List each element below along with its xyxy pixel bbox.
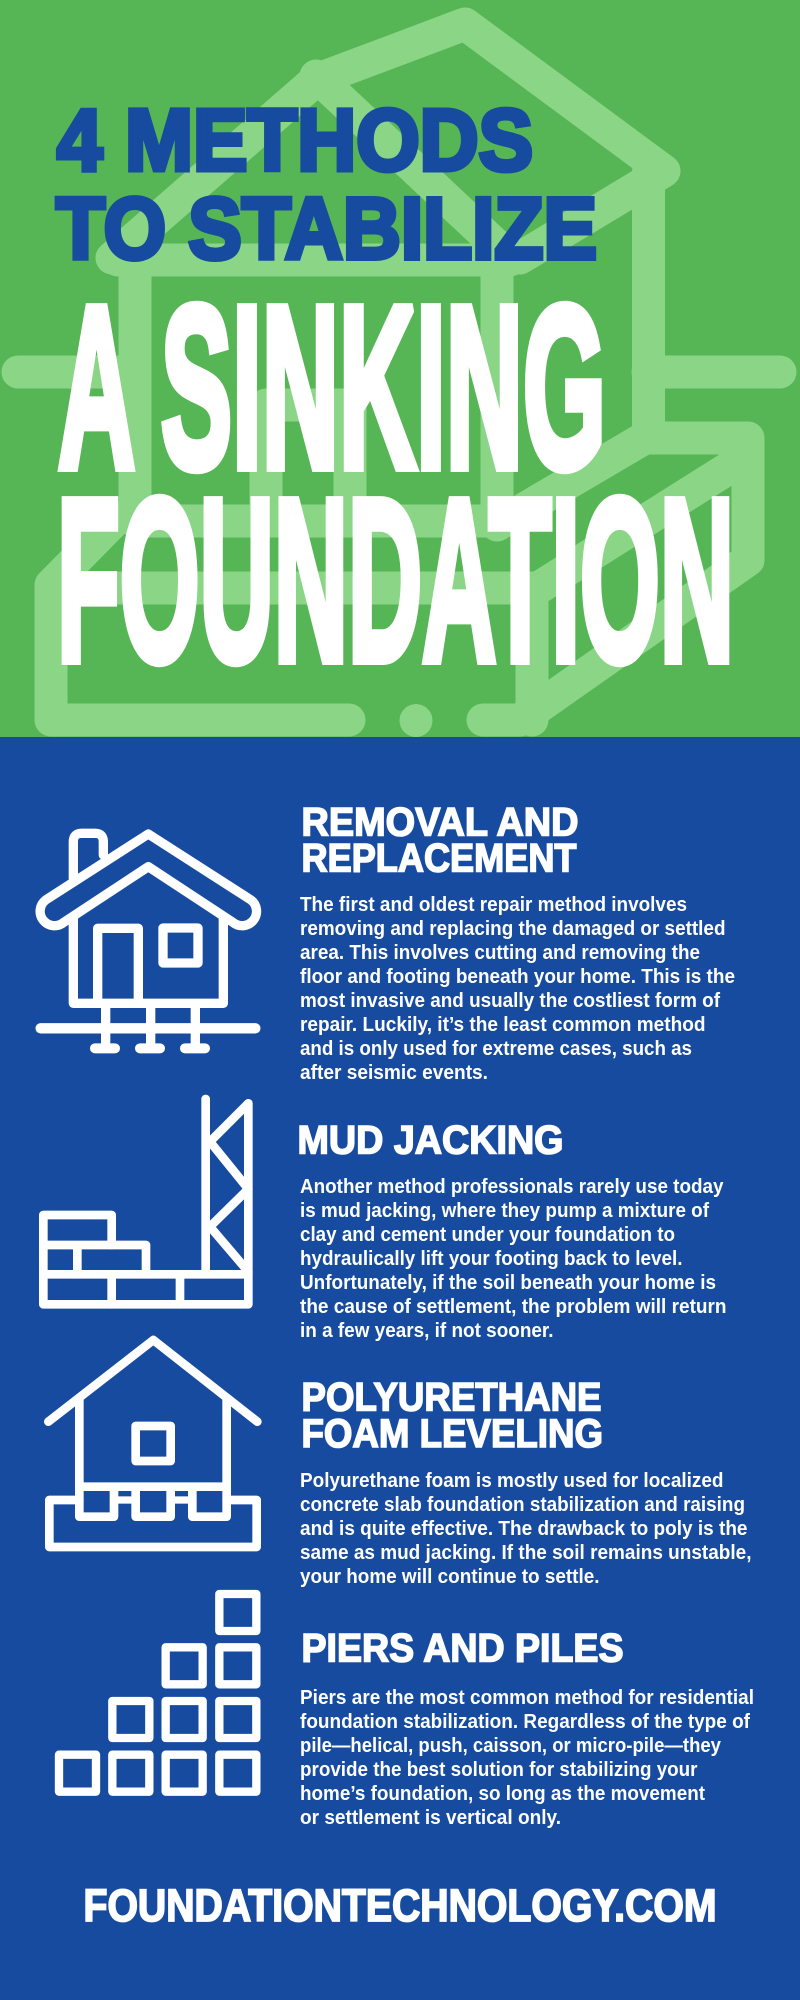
title line: to stabilize: TO STABILIZE (56, 180, 597, 278)
text block: removal and replacement: and is only used for extreme cases, such as (300, 1037, 692, 1060)
text block: mud jacking: clay and cement under your foundation to (300, 1223, 675, 1246)
text block: piers and piles (300, 1686, 754, 1829)
text block: removal and replacement: most invasive and usually the costliest form of (300, 989, 720, 1012)
title line: 4 methods: 4 METHODS (57, 92, 533, 189)
text block: piers and piles: provide the best solution for stabilizing your (300, 1758, 698, 1781)
title (56, 92, 734, 709)
text block: removal and replacement: after seismic events. (300, 1061, 488, 1084)
text block: removal and replacement: area. This involves cutting and removing the (300, 941, 700, 964)
text block: removal and replacement: floor and footing beneath your home. This is the (300, 965, 735, 988)
text block: removal and replacement: repair. Luckily, it’s the least common method (300, 1013, 706, 1036)
text block: piers and piles: pile—helical, push, caisson, or micro-pile—they (300, 1734, 722, 1757)
text block: polyurethane foam leveling: same as mud jacking. If the soil remains unstable, (300, 1541, 752, 1564)
icon: house on foam-leveled slab (48, 1340, 257, 1547)
heading: removal and replacement: REMOVAL AND (302, 800, 578, 844)
text block: removal and replacement (300, 893, 735, 1084)
text block: piers and piles: foundation stabilization. Regardless of the type of (300, 1710, 750, 1733)
heading: polyurethane foam leveling (302, 1376, 603, 1456)
text block: polyurethane foam leveling: your home will continue to settle. (300, 1565, 600, 1588)
text block: mud jacking (300, 1175, 726, 1342)
heading: removal and replacement: REPLACEMENT (302, 836, 576, 880)
text block: piers and piles: or settlement is vertical only. (300, 1806, 561, 1829)
heading: polyurethane foam leveling: POLYURETHANE (302, 1376, 602, 1420)
text block: mud jacking: in a few years, if not sooner. (300, 1319, 554, 1342)
text block: polyurethane foam leveling: and is quite effective. The drawback to poly is the (300, 1517, 748, 1540)
text block: removal and replacement: removing and replacing the damaged or settled (300, 917, 726, 940)
text block: removal and replacement: The first and oldest repair method involves (300, 893, 687, 916)
text block: mud jacking: the cause of settlement, the problem will return (300, 1295, 726, 1318)
text block: piers and piles: Piers are the most common method for residential (300, 1686, 754, 1709)
text block: mud jacking: is mud jacking, where they pump a mixture of (300, 1199, 709, 1222)
icon: house on piers (40, 833, 257, 1048)
text block: mud jacking: Unfortunately, if the soil beneath your home is (300, 1271, 716, 1294)
text block: mud jacking: Another method professionals rarely use today (300, 1175, 724, 1198)
icon: background house watermark (18, 24, 780, 737)
heading: removal and replacement (302, 800, 578, 880)
text block: piers and piles: home’s foundation, so long as the movement (300, 1782, 705, 1805)
text block: polyurethane foam leveling (300, 1469, 752, 1588)
text block: polyurethane foam leveling: Polyurethane foam is mostly used for localized (300, 1469, 724, 1492)
footer website: FOUNDATIONTECHNOLOGY.COM (84, 1880, 716, 1931)
icon: brick wall and scaffold (43, 1099, 248, 1304)
heading: polyurethane foam leveling: FOAM LEVELING (302, 1412, 603, 1456)
text block: polyurethane foam leveling: concrete slab foundation stabilization and raising (300, 1493, 745, 1516)
panel: green header background (0, 0, 800, 737)
heading: mud jacking: MUD JACKING (298, 1118, 564, 1162)
heading: piers and piles: PIERS AND PILES (302, 1626, 624, 1670)
icon: stacked pier blocks (59, 1594, 256, 1792)
text block: mud jacking: hydraulically lift your footing back to level. (300, 1247, 682, 1270)
panel: blue content background (0, 737, 800, 2000)
